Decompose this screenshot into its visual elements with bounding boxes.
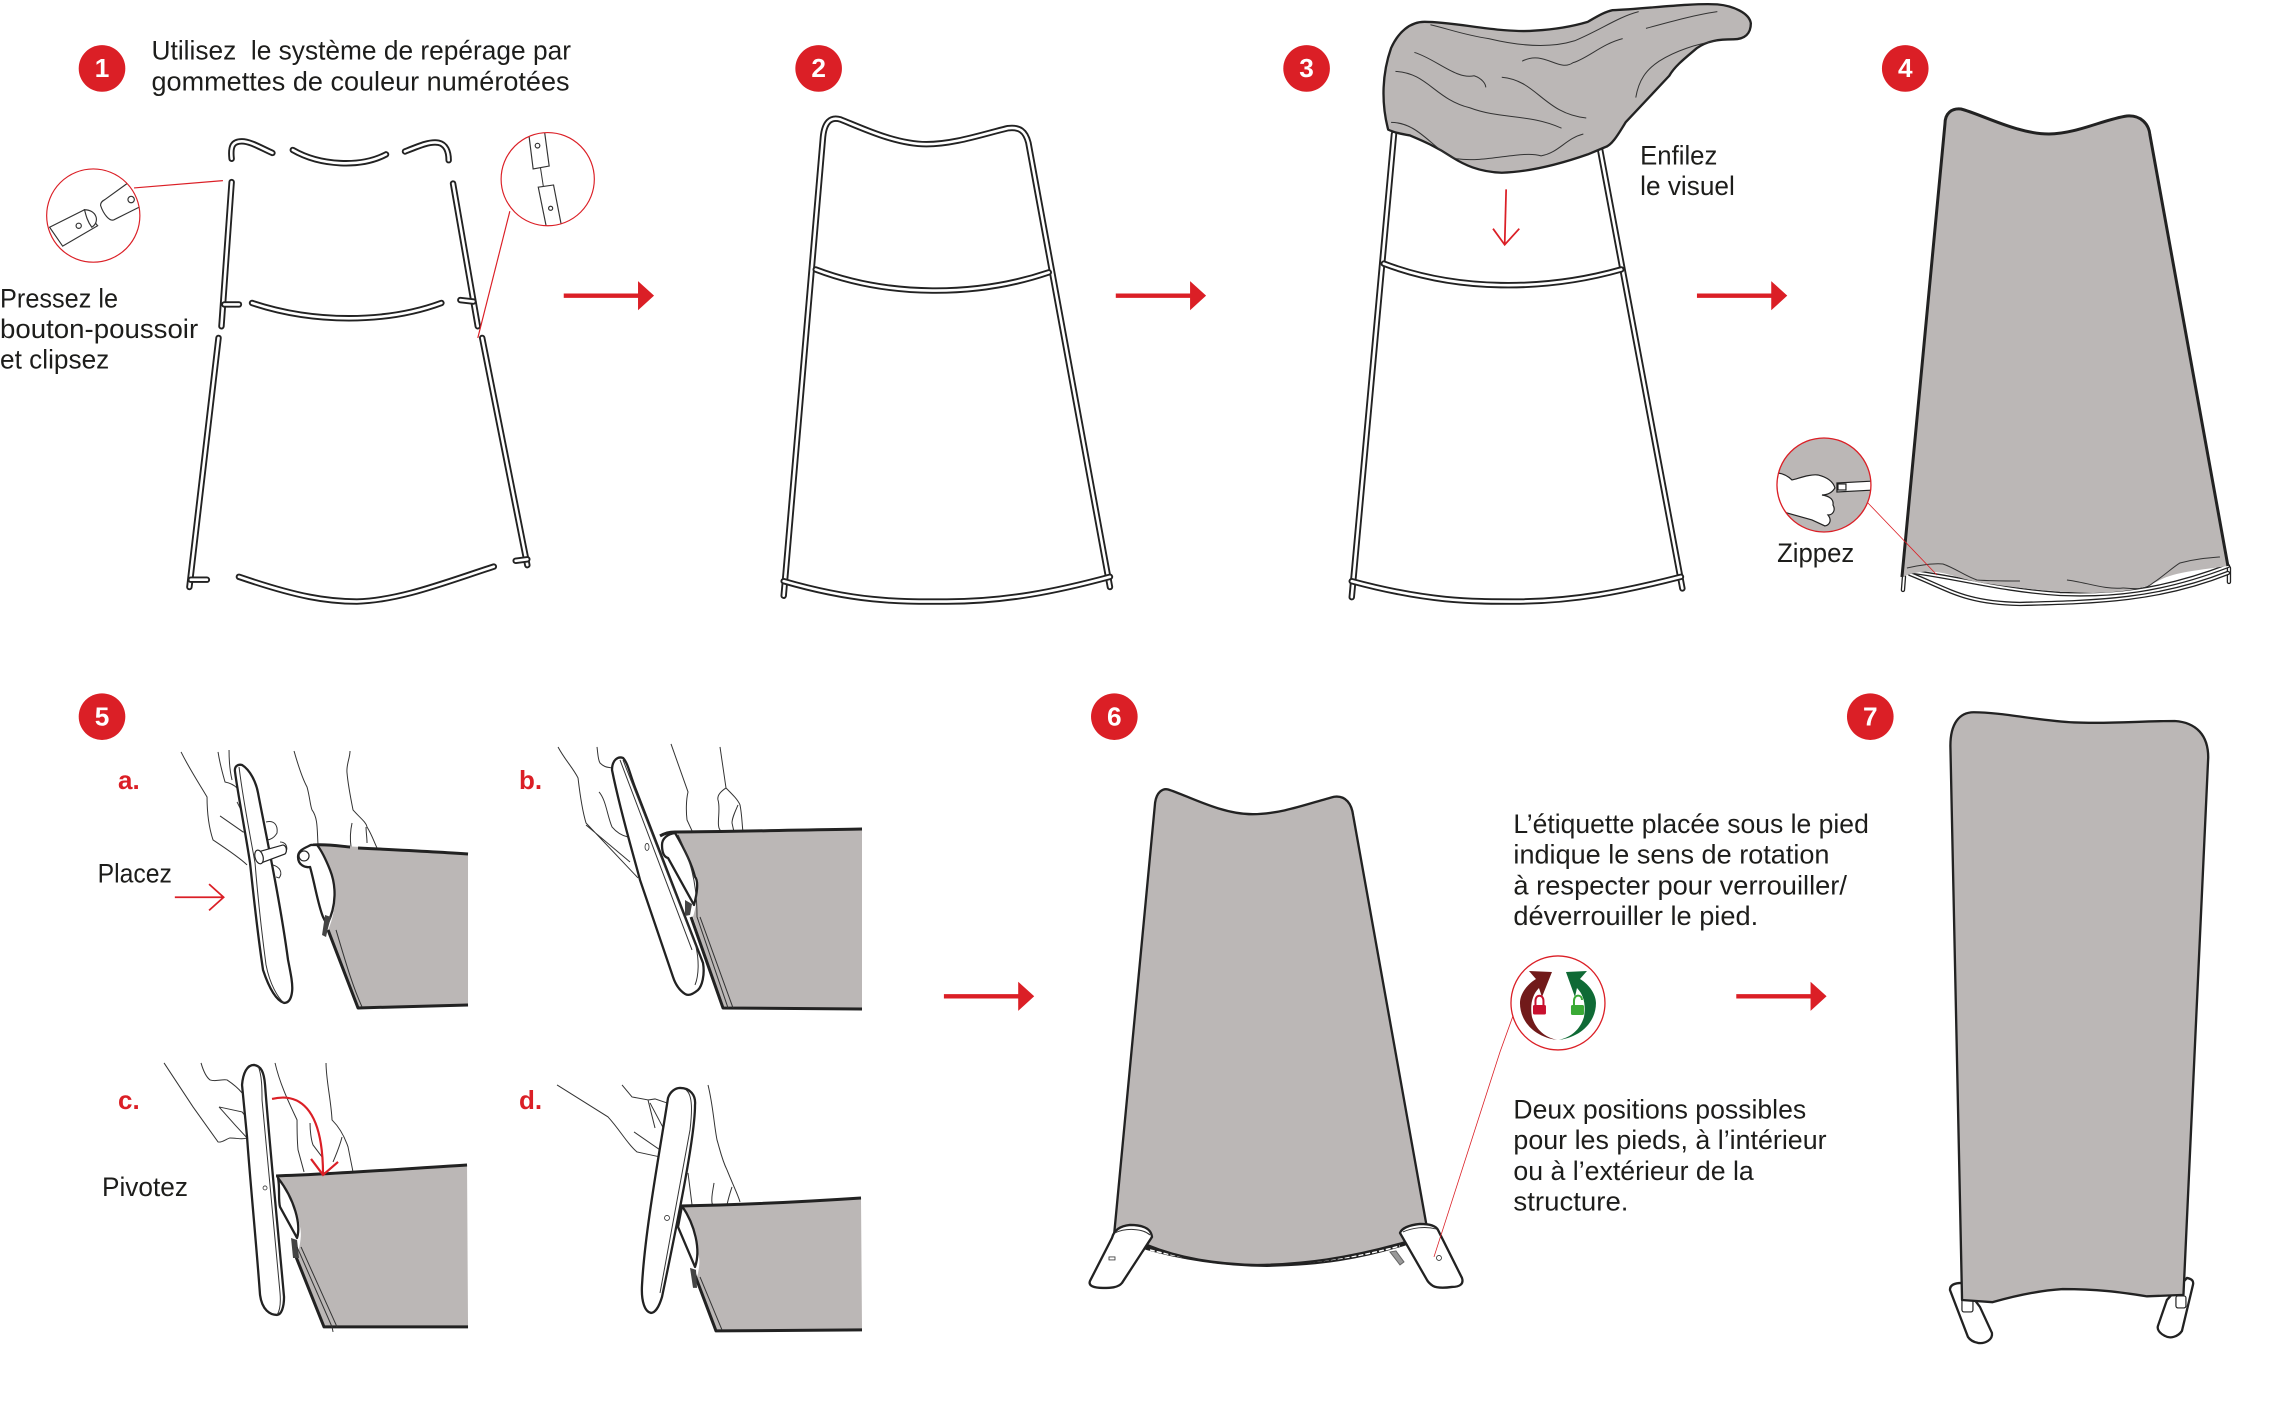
- step 7 finished banner: [1950, 712, 2208, 1302]
- step 6 text: label explanation: L’étiquette placée sous le pied: [1513, 809, 1869, 839]
- label: Placez: Placez: [98, 859, 172, 889]
- step 6 text: foot positions: [1513, 1095, 1827, 1216]
- panel c: pivot foot: [118, 1063, 468, 1332]
- arrow: step 5 to 6: [944, 982, 1034, 1011]
- step 6 text: label explanation: déverrouiller le pied.: [1513, 901, 1758, 931]
- step 3 badge: [1283, 45, 1330, 92]
- step 4 fabric on frame with rails: [1902, 109, 2229, 604]
- step 6 text: foot positions: ou à l’extérieur de la: [1513, 1156, 1754, 1186]
- step 2 badge: 2: [811, 53, 826, 83]
- panel b: engage foot: b.: [519, 765, 542, 795]
- step 3 caption: [1640, 141, 1735, 201]
- step 2 badge: [795, 45, 842, 92]
- arrow: step 3 to 4: [1697, 281, 1787, 310]
- arrow: step 2 to 3: [1116, 281, 1206, 310]
- step 6 zipper: [1143, 1243, 1407, 1265]
- panel d: foot locked: d.: [519, 1085, 542, 1115]
- step 3 caption: Enfilez: [1640, 141, 1717, 171]
- callout: clipped tube detail: [478, 128, 594, 338]
- step 1 caption: et clipsez: [0, 345, 109, 375]
- step 1 instruction text: Utilisez le système de repérage par: [152, 36, 571, 66]
- step 5 badge: 5: [95, 701, 109, 731]
- step 6 badge: 6: [1107, 701, 1122, 731]
- step 6 text: foot positions: Deux positions possibles: [1513, 1095, 1806, 1125]
- arrow: step 1 to 2: [564, 281, 654, 310]
- panel b: engage foot: [519, 744, 862, 1009]
- callout: rotation lock label: [1434, 956, 1605, 1257]
- step 7 badge: [1847, 693, 1894, 740]
- step 4 badge: [1882, 45, 1929, 92]
- step 6 right foot: [1400, 1224, 1462, 1288]
- step 6 left foot: [1090, 1225, 1152, 1288]
- step 4 caption: Zippez: [1777, 538, 1854, 568]
- step 3 caption: le visuel: [1640, 171, 1735, 201]
- panel a: place foot: [118, 750, 468, 1008]
- step 6 text: foot positions: structure.: [1513, 1186, 1628, 1216]
- step 7 right foot: [2158, 1278, 2193, 1337]
- panel d: foot locked: [519, 1085, 862, 1331]
- panel a: place foot: a.: [118, 765, 140, 795]
- step 1 caption: Pressez le: [0, 283, 118, 313]
- step 6 badge: [1091, 693, 1138, 740]
- callout: push button detail: [47, 169, 223, 262]
- step 1 instruction text: gommettes de couleur numérotées: [152, 66, 570, 96]
- panel c: pivot foot: c.: [118, 1085, 140, 1115]
- step 1 caption: [0, 283, 198, 375]
- step 1 instruction text: [152, 36, 571, 96]
- label: Pivotez: Pivotez: [102, 1172, 188, 1202]
- step 1 badge: [79, 45, 125, 92]
- step 6 fabric: [1114, 789, 1427, 1265]
- step 1 caption: bouton-poussoir: [0, 314, 198, 344]
- step 6 text: label explanation: [1513, 809, 1869, 931]
- step 7 badge: 7: [1863, 701, 1878, 731]
- step 5 badge: [79, 693, 125, 740]
- step 3 badge: 3: [1299, 53, 1314, 83]
- step 6 text: foot positions: pour les pieds, à l’intérieur: [1513, 1125, 1827, 1155]
- step 1 frame parts: [189, 141, 527, 602]
- step 3 frame: [1352, 134, 1682, 602]
- label: Placez: [98, 859, 224, 910]
- step 6 text: label explanation: à respecter pour verrouiller/: [1513, 870, 1848, 900]
- fabric being slipped over the frame: [1383, 4, 1751, 173]
- step 7 left foot: [1950, 1283, 1992, 1343]
- step 4 badge: 4: [1898, 53, 1913, 83]
- step 1 badge: 1: [95, 53, 109, 83]
- callout: zipper hand detail: [1765, 438, 1937, 575]
- step 6 text: label explanation: indique le sens de rotation: [1513, 840, 1830, 870]
- arrow: step 6 to 7: [1736, 982, 1827, 1011]
- down arrow: [1493, 189, 1519, 245]
- step 2 assembled frame: [784, 119, 1110, 602]
